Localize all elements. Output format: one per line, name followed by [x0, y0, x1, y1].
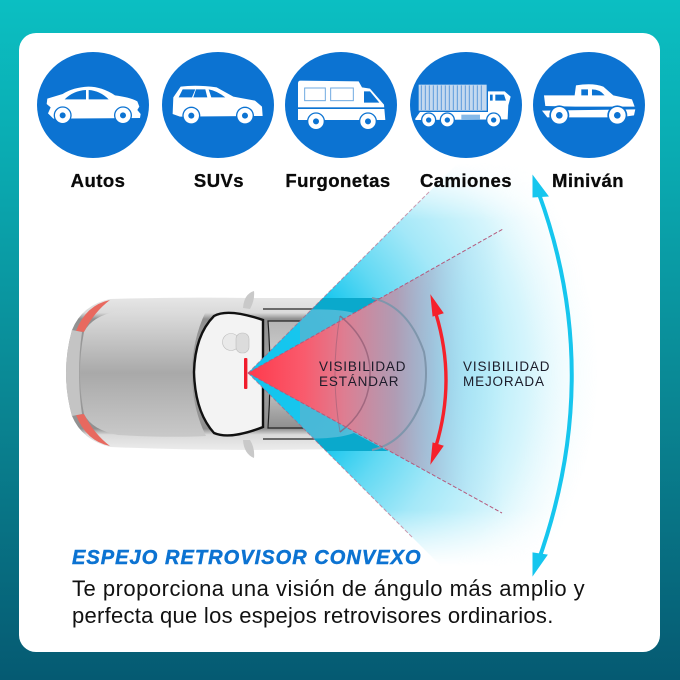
vehicle labels	[71, 170, 624, 191]
icon: SUVs	[162, 52, 274, 158]
mirror marker	[244, 358, 247, 389]
hood fill	[300, 309, 380, 446]
dark side bands	[312, 298, 388, 451]
label: standard visibility: VISIBILIDAD	[319, 359, 406, 374]
label: standard visibility: ESTÁNDAR	[319, 374, 399, 389]
vehicle labels: Camiones	[420, 170, 512, 191]
rear lights	[76, 300, 110, 446]
vehicle labels: Furgonetas	[285, 170, 391, 191]
icon: Autos	[37, 52, 149, 158]
cyan enhanced visibility beam	[249, 174, 576, 558]
description text: perfecta que los espejos retrovisores ordinarios.	[72, 603, 554, 628]
description text: Te proporciona una visión de ángulo más amplio y	[72, 576, 585, 601]
dashed limits	[248, 191, 503, 538]
heading: ESPEJO RETROVISOR CONVEXO	[72, 547, 422, 569]
vehicle labels: SUVs	[194, 170, 244, 191]
car body	[66, 298, 360, 450]
vehicle labels: Autos	[71, 170, 125, 191]
roof section	[80, 310, 206, 437]
hood outline	[372, 298, 426, 450]
vehicle labels: Miniván	[552, 170, 624, 191]
arrow: red double arc	[431, 296, 446, 463]
icon: Miniván	[533, 52, 645, 158]
icon: Furgonetas	[285, 52, 397, 158]
windshield	[268, 321, 330, 428]
rear bumper	[66, 330, 82, 416]
cabin interior	[194, 313, 263, 435]
red standard visibility wedge	[248, 229, 503, 513]
label: enhanced visibility: MEJORADA	[463, 374, 545, 389]
side trims	[263, 309, 318, 439]
label: enhanced visibility: VISIBILIDAD	[463, 359, 550, 374]
seats	[222, 333, 249, 353]
car hood seen through beam	[300, 298, 388, 451]
windshield line on hood	[340, 316, 370, 432]
mirrors	[243, 291, 254, 458]
icon: Camiones	[410, 52, 522, 158]
car top view	[66, 291, 360, 458]
arrow: cyan double arc	[533, 176, 572, 575]
